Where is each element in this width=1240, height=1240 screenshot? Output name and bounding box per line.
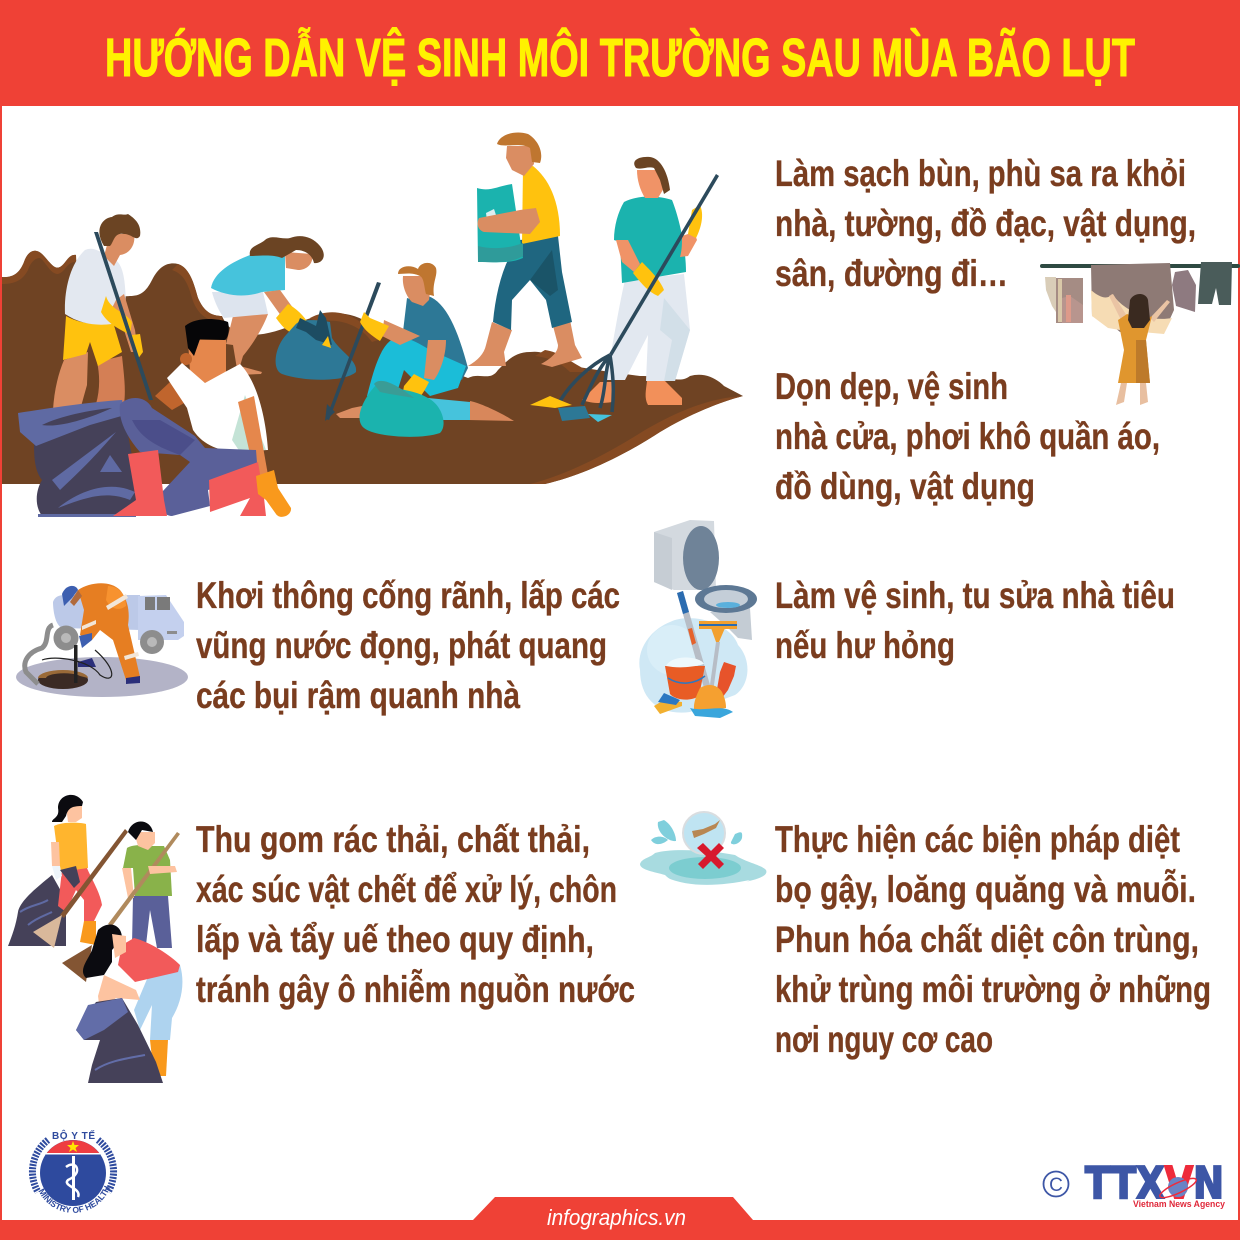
right man: [62, 822, 180, 982]
logo: Ministry of Health: [28, 1129, 118, 1213]
text: collect waste: Thu gom rác thải, chất thải,: [196, 819, 590, 860]
person 1: white shirt, yellow shorts: [53, 214, 153, 410]
text: clear drains: [196, 575, 620, 716]
text: collect waste: tránh gây ô nhiễm nguồn nước: [196, 969, 635, 1010]
text: tidy house: Dọn dẹp, vệ sinh: [775, 366, 1008, 407]
text: collect waste: lấp và tẩy uế theo quy định,: [196, 919, 594, 960]
text: kill larvae and mosquitoes: [775, 819, 1211, 1060]
mud ground: [2, 251, 743, 484]
person 4: walking with bag: [468, 132, 582, 367]
person 6: front man with black bag: [18, 319, 291, 517]
left woman: [8, 795, 128, 948]
icon: woman drying laundry: [1040, 262, 1240, 405]
front woman: [76, 924, 182, 1083]
icon: worker cleaning drain: [16, 583, 188, 697]
logo: Ministry of Health: MINISTRY OF HEALTH: [38, 1186, 110, 1213]
text: clear drains: vũng nước đọng, phát quang: [196, 625, 607, 666]
text: clean mud: [775, 153, 1196, 294]
footer tab: infographics.vn: [0, 1197, 1240, 1240]
person 3: kneeling with picker: [325, 263, 514, 421]
footer tab: infographics.vn: infographics.vn: [547, 1205, 686, 1230]
icon: toilet and cleaning tools: [639, 520, 757, 718]
text: tidy house: [775, 366, 1160, 507]
text: clean mud: sân, đường đi…: [775, 253, 1008, 294]
logo: TTXVN copyright: Vietnam News Agency: [1133, 1199, 1225, 1209]
text: clear drains: Khơi thông cống rãnh, lấp các: [196, 575, 620, 616]
text: repair toilet: [775, 575, 1175, 666]
logo: TTXVN copyright: C: [1049, 1175, 1063, 1196]
logo: Ministry of Health: BỘ Y TẾ: [52, 1129, 95, 1142]
text: repair toilet: nếu hư hỏng: [775, 625, 955, 666]
bag: dark teal: [276, 310, 356, 380]
person 2: blue shirt, bending: [211, 236, 324, 375]
text: kill larvae and mosquitoes: nơi nguy cơ cao: [775, 1019, 993, 1060]
illustration: people cleaning mud: [2, 132, 743, 517]
logo: TTXVN copyright: TTXVN: [1085, 1158, 1224, 1209]
text: collect waste: xác súc vật chết để xử lý, chôn: [196, 869, 617, 910]
text: clear drains: các bụi rậm quanh nhà: [196, 675, 520, 716]
text: tidy house: đồ dùng, vật dụng: [775, 466, 1035, 507]
person 5: teal shirt with rake: [530, 157, 719, 422]
title banner: [0, 0, 1240, 106]
text: collect waste: [196, 819, 635, 1010]
icon: larvae in puddle with red cross: [640, 812, 766, 889]
bag: teal: [360, 381, 444, 437]
icon: people collecting rubbish: [8, 795, 182, 1083]
